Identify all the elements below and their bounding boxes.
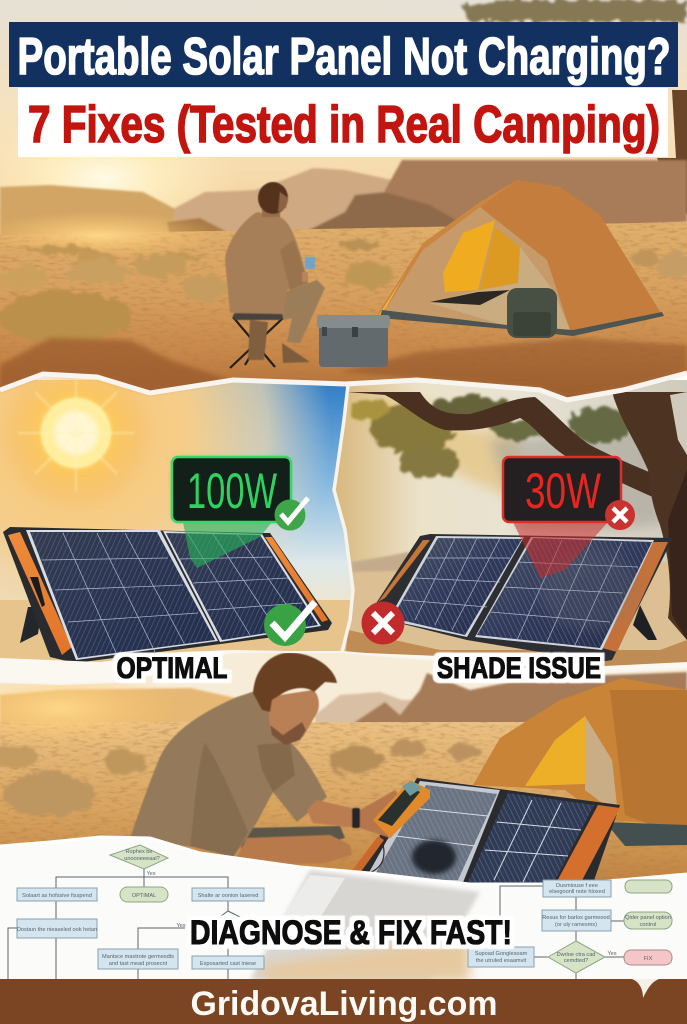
scene: shade issue panel background xyxy=(336,380,687,668)
icon: sun xyxy=(11,376,142,498)
label: diagnose and fix fast: DIAGNOSE & FIX FAST! xyxy=(190,914,512,952)
icon: small green check xyxy=(274,498,308,530)
display: 30W xyxy=(503,457,621,522)
flow: fix pill xyxy=(624,950,672,965)
flow: diamond xyxy=(548,941,605,973)
flow: optimal pill xyxy=(120,887,168,902)
label: shade issue: SHADE ISSUE xyxy=(437,652,601,685)
flow: optimal pill: OPTIMAL xyxy=(132,893,156,899)
flow: box solaart: Solaart as hofssive fisspend xyxy=(22,893,92,899)
scene: campsite top xyxy=(0,0,687,400)
flow: yes labels: Yes xyxy=(176,923,186,929)
icon: small red cross xyxy=(605,500,635,530)
backpack xyxy=(507,288,557,338)
flow: diamond: Dwrloe ctra cad xyxy=(557,952,595,958)
flow: box mantace: and tast mead prosecnt xyxy=(109,961,168,967)
solar panel: optimal xyxy=(3,522,332,663)
display: 100W: 100W xyxy=(187,463,278,519)
scene: technician testing xyxy=(0,653,687,882)
flow: box mantace: Mantsce mastrote germesdts xyxy=(102,954,174,960)
flow: fix pill: FIX xyxy=(644,956,653,962)
flow: box dostain xyxy=(17,919,97,938)
flow: start diamond xyxy=(110,845,168,869)
flow: box top right xyxy=(543,880,611,897)
tent xyxy=(377,180,664,336)
panel: flowchart xyxy=(0,837,687,982)
flow: box solaart xyxy=(17,888,97,901)
flow: connectors xyxy=(8,869,624,980)
flow: start diamond: Rophex be xyxy=(125,849,153,855)
flow: green pill order xyxy=(624,912,672,929)
kneeling man xyxy=(130,653,412,864)
flow: start diamond: unoooeeeaal? xyxy=(124,856,160,862)
solar panel: shade issue xyxy=(375,522,673,662)
flow: diamond: cemdted? xyxy=(564,958,588,964)
flow: box supoad: the utruled esaamvit xyxy=(476,958,527,964)
tree xyxy=(347,392,687,640)
tree top right xyxy=(460,0,687,215)
tent xyxy=(473,678,687,846)
flow: box top right: elsegoonll note hloxed xyxy=(549,889,605,895)
flow: green pill order: control xyxy=(640,922,656,928)
green beam xyxy=(183,522,272,568)
flow: box resuts: Resus for barlos garmeood xyxy=(542,915,610,921)
solar panel under test xyxy=(362,778,620,882)
flow: box shade: Shalte ar oonion lasered xyxy=(198,893,258,899)
flow: box resuts xyxy=(542,910,611,931)
flow: box supoad: Supoad Gonglesoam xyxy=(475,951,528,957)
flow: box supoad xyxy=(468,947,534,967)
paper strip under optimal label xyxy=(0,650,687,686)
footer url: GridovaLiving.com xyxy=(190,985,498,1023)
display: 30W: 30W xyxy=(525,463,602,519)
flow: yes labels: Yes xyxy=(146,871,156,877)
flow: box exposarted: Exposarted cast iniese xyxy=(200,961,256,967)
mountains xyxy=(0,160,687,240)
flow: box exposarted xyxy=(192,956,264,969)
flow: box mantace xyxy=(98,949,178,969)
distant mountains xyxy=(0,670,687,722)
footer bar xyxy=(0,979,687,1024)
torn edge: scene 3 top xyxy=(0,652,687,684)
torn edge: vertical divider xyxy=(334,385,353,652)
flow: box top right: Dusmiouse f eee xyxy=(556,883,598,889)
flow: yes labels xyxy=(146,871,617,957)
flow: green pill order: Qider panel option xyxy=(625,915,671,921)
cooler xyxy=(317,315,390,367)
flow: green pill top xyxy=(625,880,672,893)
shrubs xyxy=(0,739,481,817)
shrubs xyxy=(0,240,687,343)
icon: large green check xyxy=(264,602,315,646)
multimeter xyxy=(352,780,430,872)
torn edge: top scene xyxy=(0,373,687,400)
red beam xyxy=(513,522,608,578)
camp chair xyxy=(230,317,283,368)
seated man xyxy=(225,182,325,363)
flow: box resuts: (or uly ramesms) xyxy=(555,922,597,928)
icon: large red cross xyxy=(362,602,404,644)
label: optimal: OPTIMAL xyxy=(116,652,228,685)
flow: yes labels: Yes xyxy=(607,951,617,957)
faded solar panel xyxy=(250,870,480,982)
flow: box dostain: Dostaın the nieaseled ook hetan xyxy=(17,927,97,933)
display: 100W xyxy=(172,457,291,522)
flow: box shade xyxy=(192,888,264,901)
scene: optimal panel background xyxy=(0,376,352,662)
